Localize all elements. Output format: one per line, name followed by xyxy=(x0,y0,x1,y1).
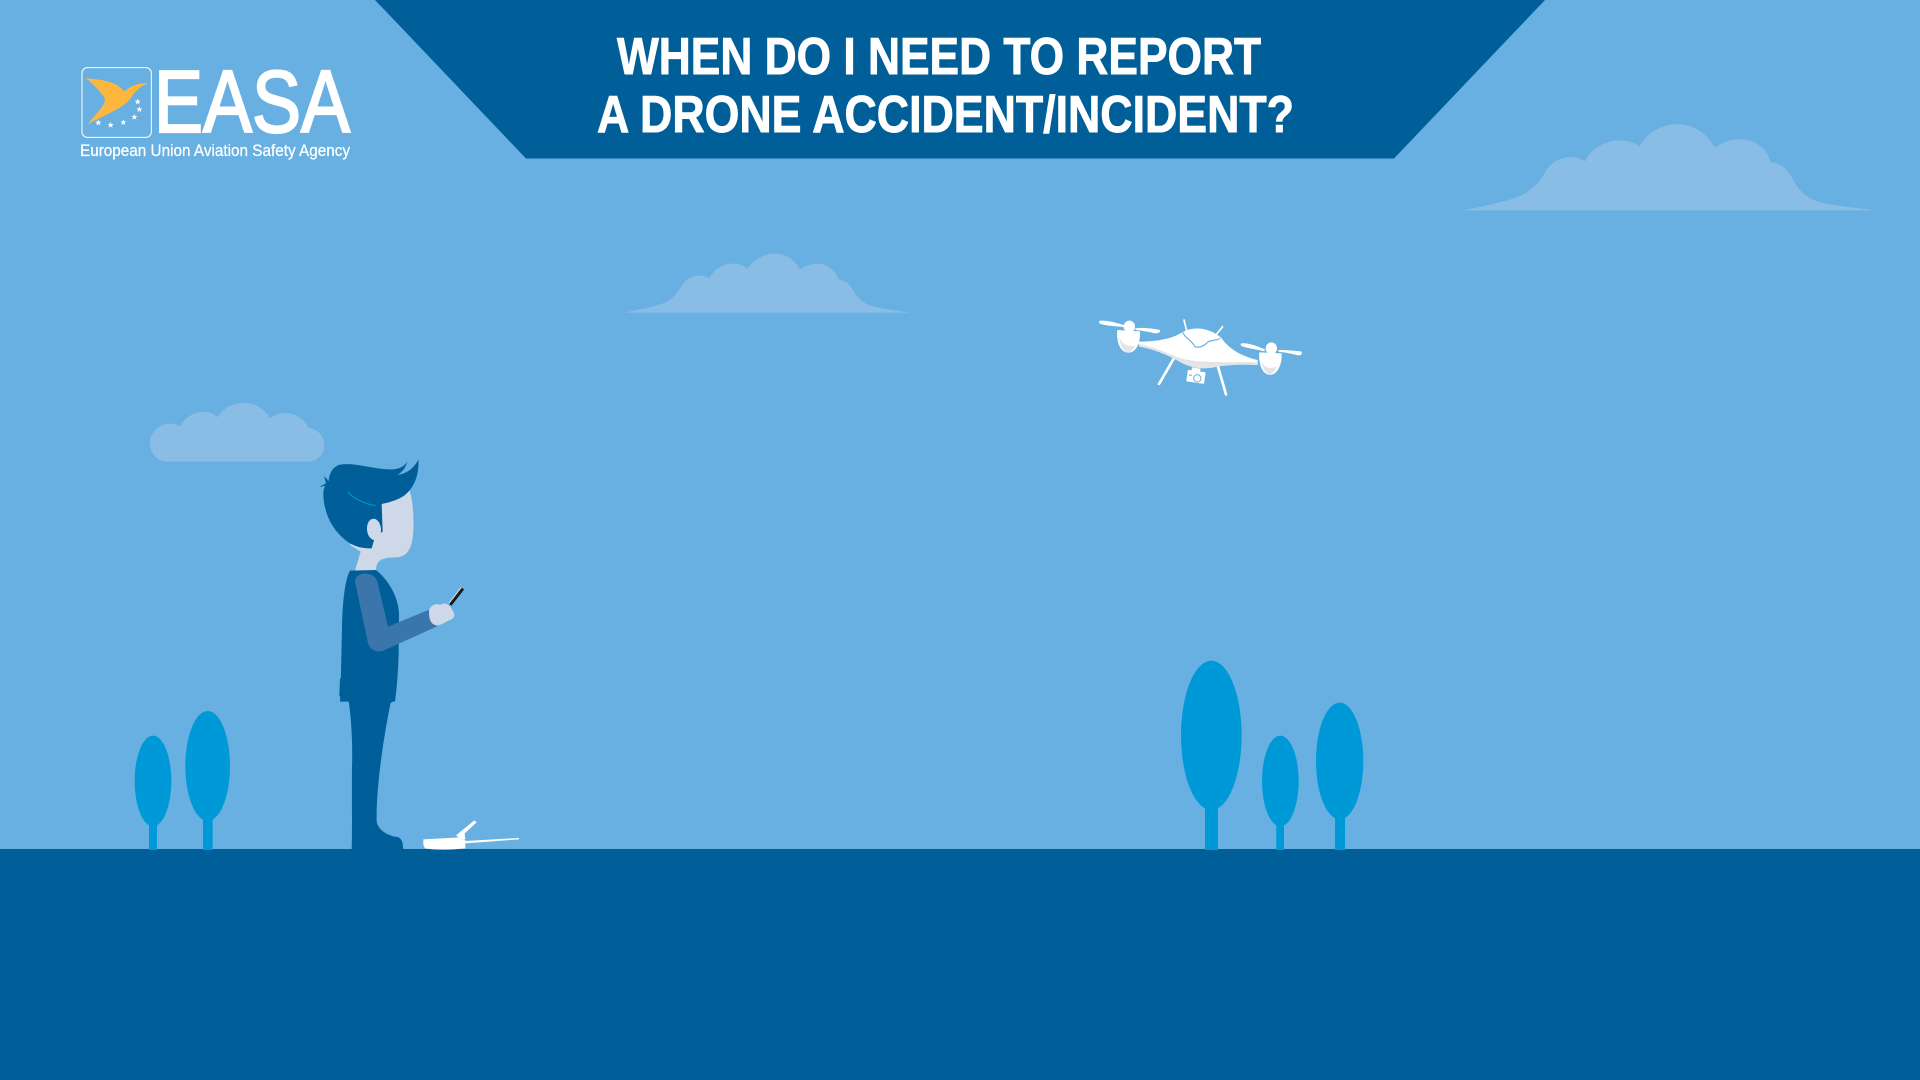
torso xyxy=(340,570,399,702)
title text: A DRONE ACCIDENT/INCIDENT? xyxy=(597,86,1294,144)
title text xyxy=(597,28,1294,144)
face and neck xyxy=(350,490,413,571)
right rotor xyxy=(1241,342,1302,375)
drone body xyxy=(1138,328,1258,368)
cloud: centre xyxy=(625,253,910,313)
drone canopy line xyxy=(1183,332,1220,347)
person: drone pilot xyxy=(319,459,463,850)
logo wordmark: EASA xyxy=(154,52,350,151)
cloud: top right xyxy=(1463,124,1875,210)
left rotor xyxy=(1099,321,1160,353)
trees: left pair xyxy=(135,711,230,850)
drone case on ground xyxy=(423,820,519,850)
drone body shadow xyxy=(1139,344,1258,368)
drone camera xyxy=(1186,367,1206,384)
ground xyxy=(0,849,1920,1080)
arm xyxy=(355,574,437,651)
person upper body xyxy=(319,459,463,702)
drone antennas and legs xyxy=(1159,320,1226,394)
logo emblem xyxy=(82,68,151,137)
logo tagline: European Union Aviation Safety Agency xyxy=(80,141,350,160)
logo: EASA xyxy=(80,52,350,160)
title banner xyxy=(375,0,1545,158)
hand xyxy=(429,603,454,625)
cloud: left xyxy=(150,403,324,462)
banner shape xyxy=(375,0,1545,158)
phone controller xyxy=(449,587,463,605)
person legs xyxy=(339,678,403,850)
hair xyxy=(319,459,418,548)
drone in flight xyxy=(1099,320,1302,394)
ear xyxy=(366,518,382,541)
hair highlight xyxy=(348,492,376,506)
trees: right group xyxy=(1181,661,1363,850)
title text: WHEN DO I NEED TO REPORT xyxy=(617,28,1261,86)
